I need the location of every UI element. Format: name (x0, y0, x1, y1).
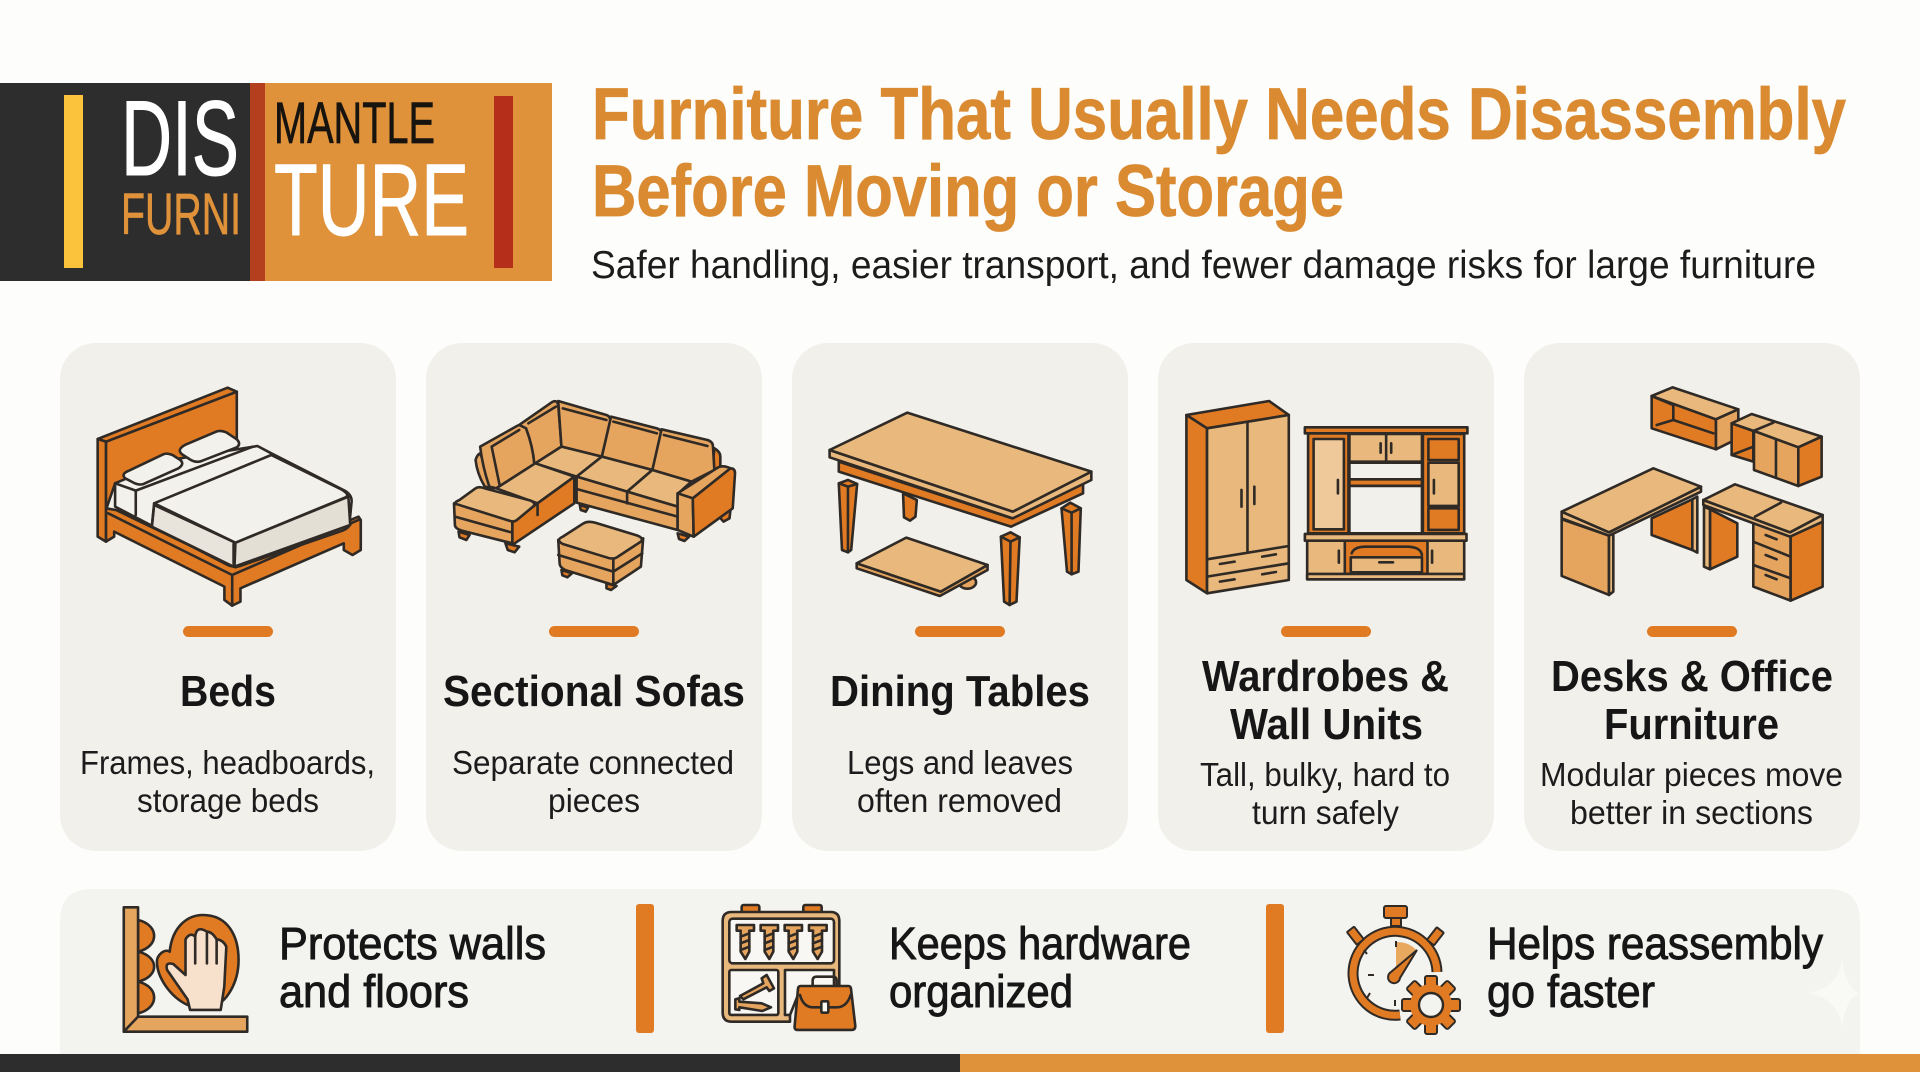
benefit text: walls and floors (279, 918, 546, 1017)
icon: sectional sofa (454, 401, 735, 590)
description (452, 744, 734, 819)
title (592, 74, 1846, 232)
heading: Desks & Office (1551, 652, 1833, 701)
heading: Dining Tables (830, 667, 1090, 716)
description: pieces (548, 782, 640, 819)
benefit text: hardware (889, 918, 1191, 1017)
panel: dining tables (792, 343, 1128, 851)
description (80, 744, 375, 819)
heading: Furniture (1604, 700, 1779, 749)
sparkle decoration (1808, 960, 1859, 1027)
heading: Wall Units (1230, 700, 1423, 749)
description: Modular pieces move (1540, 756, 1843, 793)
heading: Sectional Sofas (443, 667, 745, 716)
panel: desks and office furniture (1524, 343, 1860, 851)
icon: hardware organizer (723, 905, 855, 1030)
heading (1551, 652, 1833, 749)
description (1540, 756, 1843, 831)
description: better in sections (1570, 794, 1813, 831)
panel: sectional sofas (426, 343, 762, 851)
accent bar (183, 626, 273, 637)
icon: stopwatch with gear (1347, 906, 1460, 1034)
benefit text: hardware: Keeps hardware (889, 918, 1191, 969)
icon: hand protecting wall (124, 907, 247, 1032)
divider (1266, 904, 1284, 1033)
heading: Wardrobes & (1202, 652, 1449, 701)
description: Tall, bulky, hard to (1200, 756, 1450, 793)
heading: Beds (180, 667, 276, 716)
accent bar (549, 626, 639, 637)
logo banner (0, 78, 552, 281)
accent bar (1281, 626, 1371, 637)
heading (1202, 652, 1449, 749)
panel: wardrobes and wall units (1158, 343, 1494, 851)
accent bar (1647, 626, 1737, 637)
benefit text: reassembly (1487, 918, 1823, 1017)
panel: beds (60, 343, 396, 851)
logo banner: MANTLE (274, 91, 435, 156)
logo banner: DIS (121, 78, 239, 198)
description: Frames, headboards, (80, 744, 375, 781)
icon: desks and shelves (1562, 387, 1823, 601)
description: often removed (857, 782, 1062, 819)
description (1200, 756, 1450, 831)
icon: dining table (830, 413, 1091, 605)
description: storage beds (137, 782, 319, 819)
panel: benefits strip (60, 889, 1860, 1054)
divider (636, 904, 654, 1033)
accent bar (915, 626, 1005, 637)
benefit text: reassembly: go faster (1487, 966, 1655, 1017)
benefit text: walls and floors: Protects walls (279, 918, 546, 969)
logo banner: FURNI (121, 182, 241, 247)
description: Legs and leaves (847, 744, 1073, 781)
icon: wardrobe and wall unit (1186, 401, 1467, 593)
description (847, 744, 1073, 819)
benefit text: hardware: organized (889, 966, 1073, 1017)
footer bar (0, 1054, 1920, 1072)
description: turn safely (1252, 794, 1399, 831)
benefit text: walls and floors: and floors (279, 966, 469, 1017)
benefit text: reassembly: Helps reassembly (1487, 918, 1823, 969)
description: Separate connected (452, 744, 734, 781)
logo banner: TURE (274, 143, 469, 257)
icon: bed (98, 388, 361, 606)
title: Before Moving or Storage (592, 151, 1344, 232)
subtitle: Safer handling, easier transport, and fewer damage risks for large furniture (591, 244, 1816, 287)
